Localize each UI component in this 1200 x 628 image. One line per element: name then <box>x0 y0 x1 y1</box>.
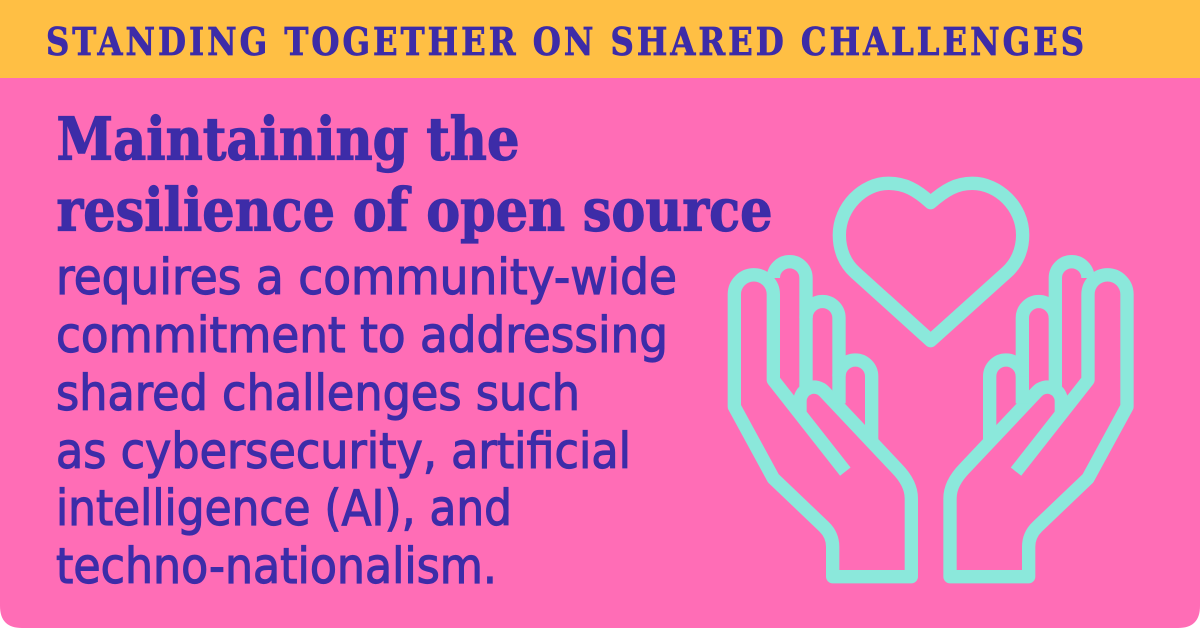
text block: supporting paragraph: intelligence (AI), and <box>56 480 512 537</box>
icon: left hand <box>734 262 911 577</box>
text block: supporting paragraph: shared challenges such <box>56 365 580 422</box>
icon: heart held by two hands <box>734 183 1127 577</box>
heading: main statement <box>56 104 772 244</box>
text block: supporting paragraph: requires a community-wide <box>56 249 677 306</box>
icon: right hand <box>950 262 1127 577</box>
text block: supporting paragraph: techno-nationalism. <box>56 538 497 595</box>
panel: yellow header band <box>0 0 1200 78</box>
heading: main statement: Maintaining the <box>56 104 520 174</box>
text block: supporting paragraph <box>56 249 677 595</box>
heading: main statement: resilience of open source <box>56 176 772 244</box>
text block: supporting paragraph: commitment to addressing <box>56 307 668 364</box>
icon: heart <box>839 183 1023 341</box>
text block: supporting paragraph: as cybersecurity, artificial <box>56 423 631 480</box>
